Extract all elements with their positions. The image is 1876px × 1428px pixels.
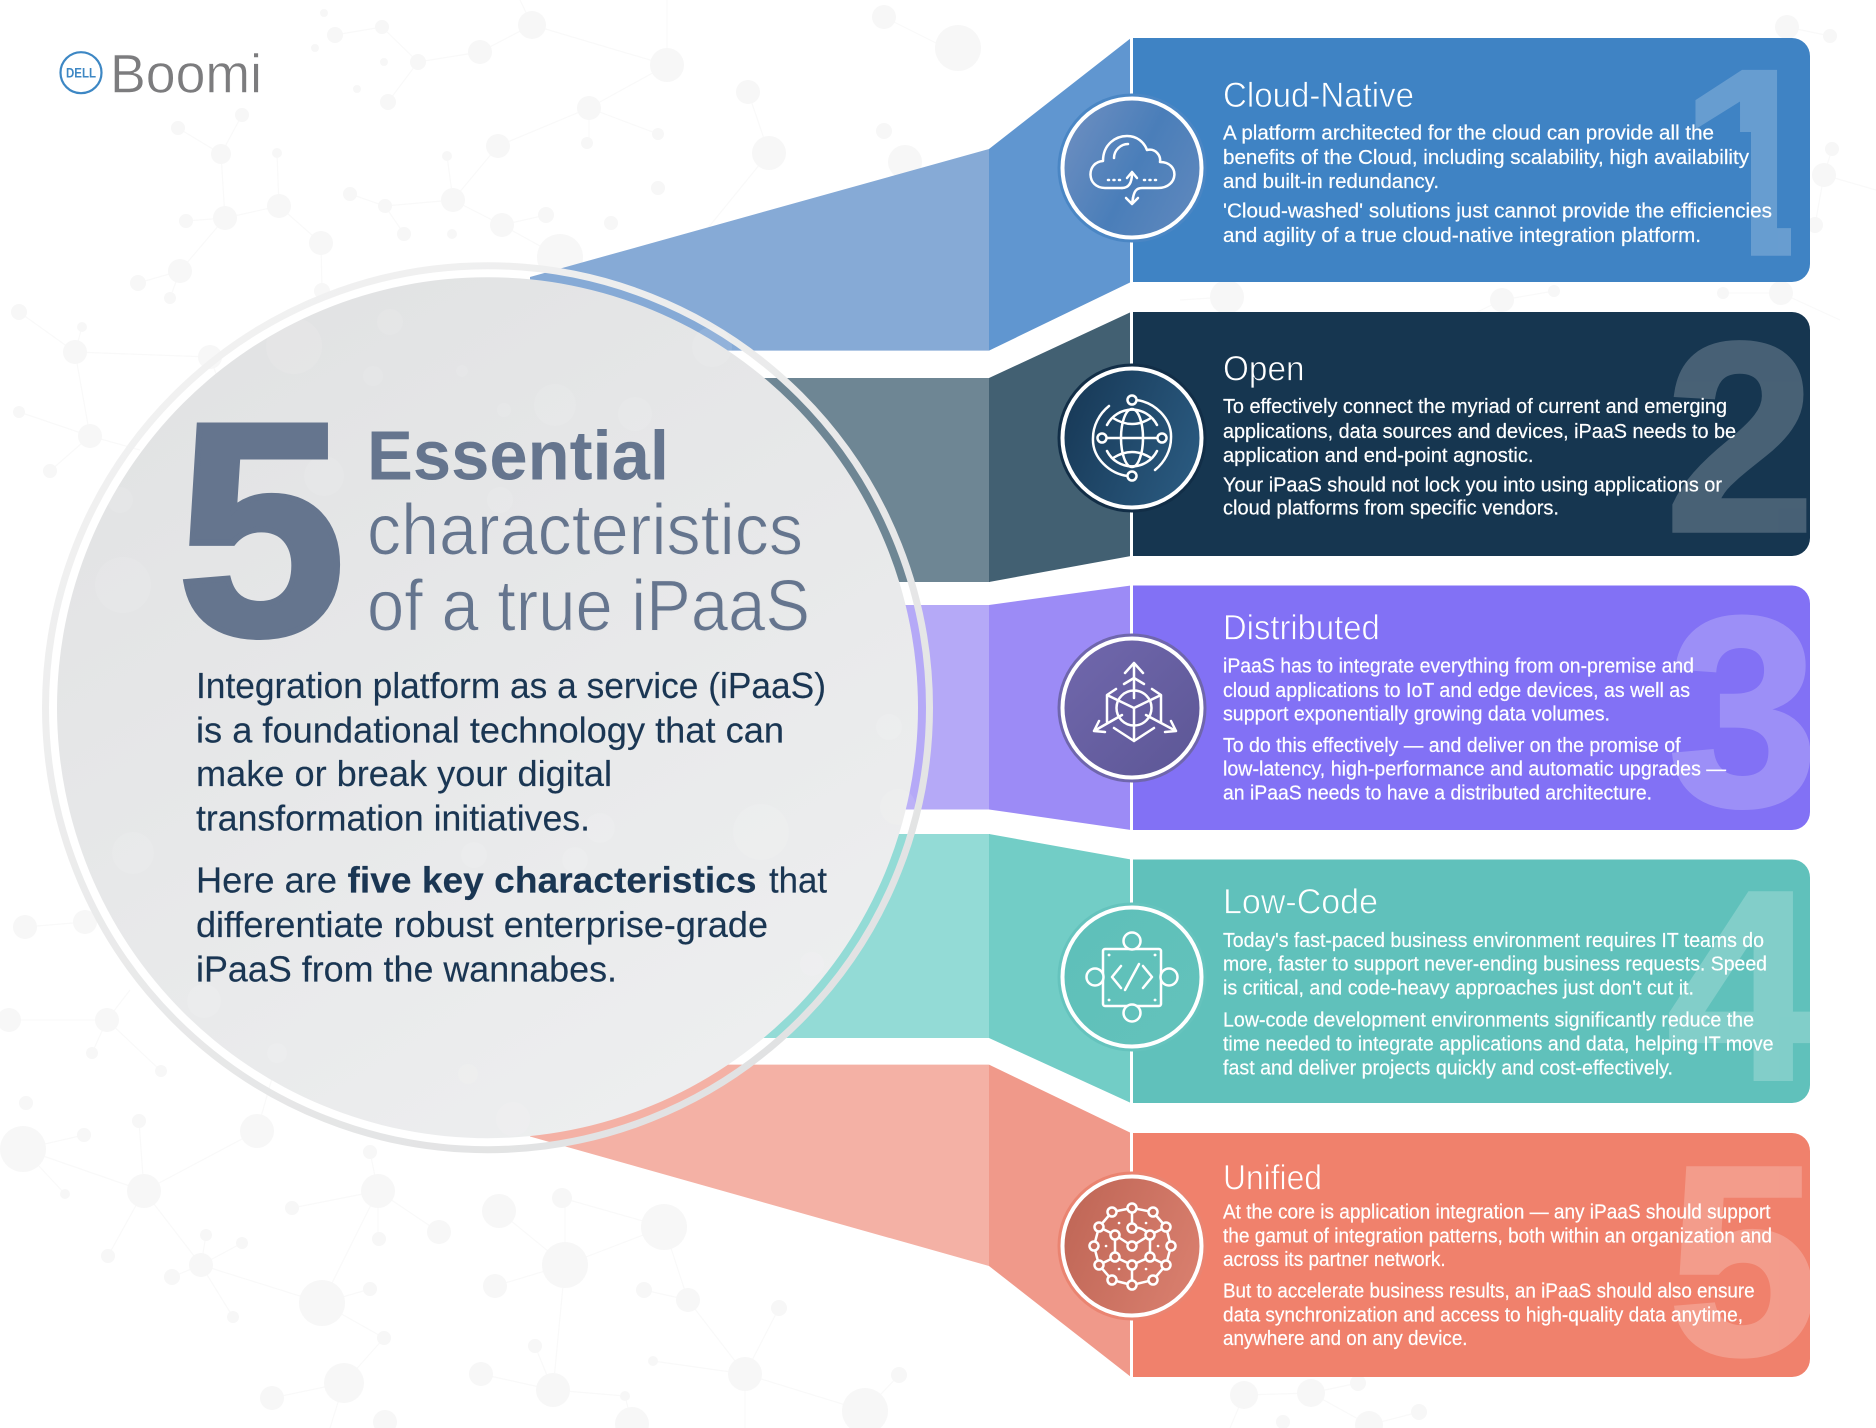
text: Distributed description: low-latency, high-performance and automatic upgrades —: [1223, 759, 1726, 781]
text: Distributed description: [1223, 656, 1726, 805]
text: Low-Code description: fast and deliver projects quickly and cost-effectively.: [1223, 1057, 1673, 1079]
numeral 5: 5: [1668, 1111, 1818, 1412]
heading: [367, 416, 810, 647]
text: Cloud-Native description: [1223, 123, 1772, 247]
text: Low-Code description: more, faster to support never-ending business requests. Speed: [1223, 954, 1767, 976]
text: Unified description: anywhere and on any device.: [1223, 1328, 1468, 1350]
text: Distributed description: To do this effectively — and deliver on the promise of: [1223, 735, 1681, 757]
text: Low-Code description: time needed to integrate applications and data, helping IT move: [1223, 1033, 1774, 1055]
text: Cloud-Native description: A platform architected for the cloud can provide all the: [1223, 123, 1714, 145]
panel: Unified: [1058, 1133, 1810, 1377]
text: Open description: To effectively connect the myriad of current and emerging: [1223, 396, 1727, 418]
text: Open description: Your iPaaS should not lock you into using applications or: [1223, 474, 1722, 496]
text: Distributed description: cloud applications to IoT and edge devices, as well as: [1223, 680, 1690, 702]
numeral 1: 1: [1677, 13, 1827, 314]
text: Low-Code description: Low-code development environments significantly reduce the: [1223, 1009, 1754, 1031]
text: Distributed description: iPaaS has to integrate everything from on-premise and: [1223, 656, 1694, 678]
heading: Open: Open: [1223, 350, 1304, 389]
mid funnel bands: [989, 38, 1131, 1377]
intro text: iPaaS from the wannabes.: [196, 948, 617, 989]
intro text: Integration platform as a service (iPaaS): [196, 665, 826, 706]
logo: Dell Boomi: DELL: [66, 64, 96, 80]
text: Unified description: across its partner network.: [1223, 1249, 1446, 1271]
icon: globe: [1058, 364, 1206, 512]
icon: network sphere: [1058, 1172, 1206, 1320]
heading: Unified: Unified: [1223, 1158, 1322, 1197]
big numeral 5: 5: [177, 361, 346, 699]
intro text: make or break your digital: [196, 753, 612, 794]
text: Cloud-Native description: and agility of a true cloud-native integration platform.: [1223, 225, 1701, 247]
heading: Low-Code: Low-Code: [1223, 883, 1378, 922]
text: Open description: [1223, 396, 1736, 520]
panel: Low-Code: [1058, 860, 1810, 1103]
intro text: transformation initiatives.: [196, 798, 590, 839]
panel: Open: [1058, 312, 1810, 556]
text: Distributed description: support exponentially growing data volumes.: [1223, 704, 1610, 726]
text: Low-Code description: is critical, and code-heavy approaches just don't cut it.: [1223, 978, 1694, 1000]
numeral 3: 3: [1668, 562, 1818, 863]
numeral 2: 2: [1665, 288, 1815, 589]
central disc: [46, 266, 930, 1150]
text: Unified description: data synchronization and access to high-quality data anytime,: [1223, 1305, 1743, 1327]
logo: Dell Boomi: Boomi: [110, 42, 262, 104]
heading: Essential: [367, 416, 669, 494]
text: Unified description: [1223, 1201, 1772, 1350]
icon: code puzzle: [1058, 902, 1206, 1052]
intro text: is a foundational technology that can: [196, 709, 784, 750]
light funnel bands: [530, 149, 990, 1266]
numeral 4: 4: [1667, 836, 1819, 1137]
text: Distributed description: an iPaaS needs to have a distributed architecture.: [1223, 783, 1652, 805]
text: Open description: applications, data sources and devices, iPaaS needs to be: [1223, 421, 1736, 443]
vertical white divider: [1130, 38, 1133, 1377]
intro text: [196, 665, 827, 989]
text: Unified description: But to accelerate business results, an iPaaS should also ensure: [1223, 1280, 1755, 1302]
text: Low-Code description: [1223, 930, 1774, 1079]
intro text: that: [769, 860, 827, 900]
panel: Cloud-Native: [1058, 38, 1810, 282]
intro text: differentiate robust enterprise-grade: [196, 904, 768, 945]
panel: Distributed: [1058, 586, 1810, 830]
text: Cloud-Native description: benefits of the Cloud, including scalability, high availability: [1223, 147, 1749, 169]
text: Unified description: the gamut of integration patterns, both within an organization and: [1223, 1225, 1772, 1247]
text: Open description: application and end-point agnostic.: [1223, 445, 1534, 467]
text: Cloud-Native description: 'Cloud-washed' solutions just cannot provide the efficiencies: [1223, 200, 1772, 222]
text: Unified description: At the core is application integration — any iPaaS should support: [1223, 1201, 1771, 1223]
intro text: five key characteristics: [348, 860, 756, 900]
intro text: Here are: [196, 860, 337, 900]
heading: Cloud-Native: Cloud-Native: [1223, 76, 1414, 115]
text: Cloud-Native description: and built-in redundancy.: [1223, 171, 1439, 193]
heading: of a true iPaaS: [367, 567, 810, 647]
heading: characteristics: [367, 491, 803, 571]
text: Low-Code description: Today's fast-paced business environment requires IT teams do: [1223, 930, 1764, 952]
heading: Distributed: Distributed: [1223, 609, 1380, 648]
icon: cube with arrows: [1058, 634, 1206, 782]
icon: cloud: [1058, 94, 1206, 242]
text: Open description: cloud platforms from specific vendors.: [1223, 498, 1559, 520]
